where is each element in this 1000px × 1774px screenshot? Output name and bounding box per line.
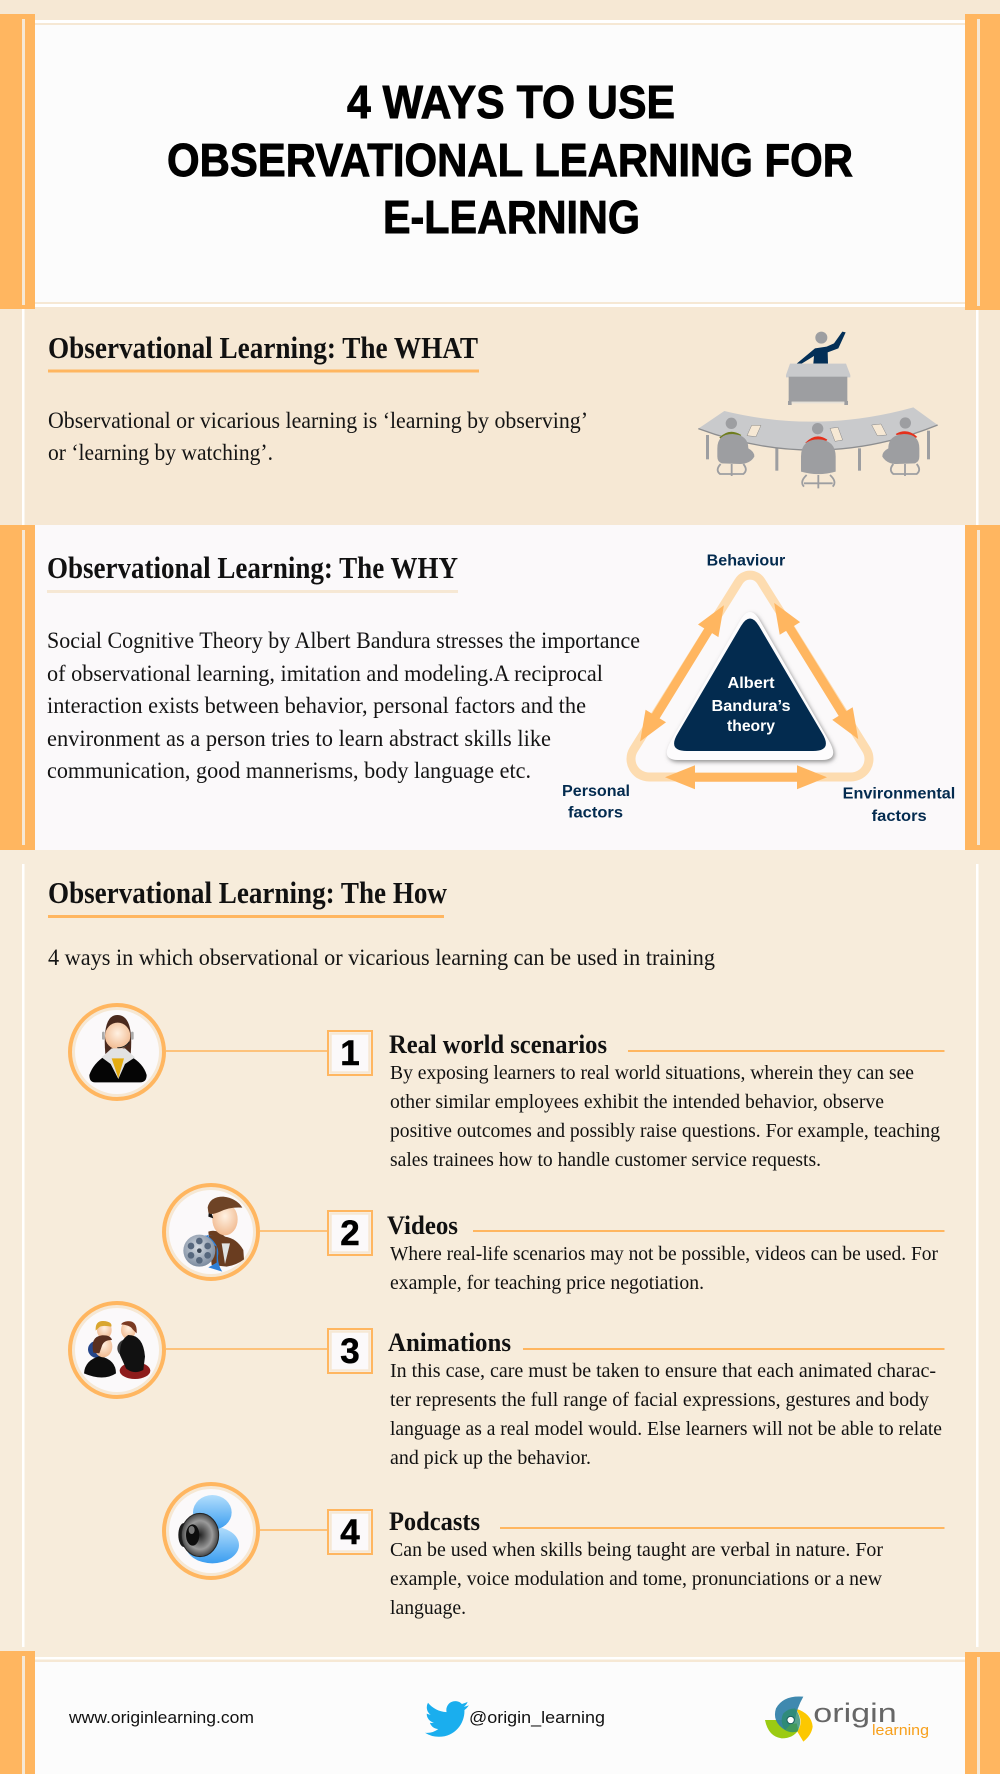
text: animations: and pick up the behavior.: [390, 1447, 591, 1469]
heading: the what: Observational Learning: The WHAT: [48, 330, 478, 365]
text: real world scenarios: By exposing learners to real world situations, wherein they can see: [390, 1062, 914, 1084]
arrow: personal to environmental factors: [665, 765, 827, 789]
triangle: white backing: [667, 612, 833, 760]
text: podcasts: Can be used when skills being taught are verbal in nature. For: [390, 1539, 883, 1561]
number box 3: 3: [340, 1332, 360, 1371]
panel: the what: [22, 307, 978, 525]
text: podcasts: [390, 1539, 883, 1619]
text: real world scenarios: [390, 1062, 940, 1171]
panel: the why: [0, 525, 1000, 850]
number box 4: [328, 1510, 372, 1554]
icon: twitter bird: [425, 1701, 469, 1737]
label: environmental factors: [843, 786, 955, 825]
panel: footer: [35, 1657, 965, 1774]
left orange side bars: [0, 14, 35, 1774]
number box 4: 4: [340, 1513, 360, 1552]
text: real world scenarios: positive outcomes and possibly raise questions. For example, teaching: [390, 1120, 940, 1142]
number box 3: [328, 1329, 372, 1373]
item 1: real world scenarios: [70, 1005, 944, 1171]
text: social cognitive theory: Social Cognitive Theory by Albert Bandura stresses the importance: [47, 628, 640, 653]
number box 2: 2: [340, 1214, 360, 1253]
text: animations: [390, 1360, 942, 1469]
text: social cognitive theory: [47, 628, 640, 783]
icon: user with speaker: [164, 1484, 258, 1578]
text: website: www.originlearning.com: [68, 1708, 254, 1727]
heading: real world scenarios: Real world scenarios: [389, 1030, 607, 1059]
arrow: behaviour to environmental factors: [764, 597, 868, 745]
icon: headset woman: [70, 1005, 164, 1099]
logo: origin learning: learning: [872, 1722, 929, 1739]
triangle: Albert Bandura's theory: Bandura’s: [712, 698, 791, 715]
logo: origin learning: [765, 1696, 929, 1742]
title: E-LEARNING: [383, 191, 640, 243]
text: podcasts: example, voice modulation and tome, pronunciations or a new: [390, 1568, 883, 1590]
heading: podcasts: Podcasts: [389, 1507, 480, 1536]
icon: classroom: [698, 332, 938, 488]
text: videos: Where real-life scenarios may not be possible, videos can be used. For: [390, 1243, 938, 1265]
label: personal factors: Personal: [562, 783, 630, 800]
text: social cognitive theory: interaction exists between behavior, personal factors and the: [47, 693, 586, 718]
label: behaviour: Behaviour: [707, 553, 785, 570]
diagram: reciprocal triangle: [562, 553, 955, 825]
text: real world scenarios: other similar employees exhibit the intended behavior, observe: [390, 1091, 884, 1113]
text: social cognitive theory: of observational learning, imitation and modeling.A reciprocal: [47, 661, 603, 686]
text: intro: 4 ways in which observational or vicarious learning can be used in training: [48, 945, 715, 970]
text: videos: example, for teaching price negotiation.: [390, 1272, 704, 1294]
item 2: videos: [164, 1185, 944, 1294]
text: videos: [390, 1243, 938, 1294]
triangle: Albert Bandura's theory: Albert: [728, 675, 775, 692]
item 4: podcasts: [164, 1484, 944, 1619]
label: personal factors: factors: [568, 805, 623, 822]
title: [167, 76, 853, 243]
text: social cognitive theory: communication, good mannerisms, body language etc.: [47, 758, 531, 783]
triangle: Albert Bandura's theory: [674, 618, 826, 751]
right orange side bars: [965, 14, 1000, 1774]
text: definition: [48, 408, 588, 465]
icon: man with film reel: [164, 1185, 258, 1279]
heading: the how: Observational Learning: The How: [48, 875, 448, 910]
heading: videos: Videos: [387, 1211, 458, 1240]
text: animations: ter represents the full range of facial expressions, gestures and body: [390, 1389, 929, 1411]
number box 1: [328, 1031, 372, 1075]
text: definition: or ‘learning by watching’.: [48, 440, 273, 465]
text: animations: language as a real model would. Else learners will not be able to relate: [390, 1418, 942, 1440]
title: 4 WAYS TO USE: [347, 76, 675, 128]
label: personal factors: [562, 783, 630, 822]
title: OBSERVATIONAL LEARNING FOR: [167, 134, 853, 186]
heading: animations: Animations: [388, 1328, 511, 1357]
text: definition: Observational or vicarious learning is ‘learning by observing’: [48, 408, 588, 433]
heading: the why: Observational Learning: The WHY: [47, 550, 458, 585]
icon: group of people: [70, 1303, 164, 1397]
item 3: animations: [70, 1303, 944, 1469]
logo: origin learning: origin: [813, 1698, 897, 1728]
text: animations: In this case, care must be taken to ensure that each animated charac-: [390, 1360, 936, 1382]
panel: the how: [0, 850, 1000, 1657]
number box 2: [328, 1211, 372, 1255]
triangle: Albert Bandura's theory: theory: [727, 718, 775, 735]
panel: title: [35, 20, 965, 307]
text: real world scenarios: sales trainees how to handle customer service requests.: [390, 1149, 821, 1171]
label: environmental factors: factors: [872, 808, 927, 825]
label: environmental factors: Environmental: [843, 786, 955, 803]
text: social cognitive theory: environment as a person tries to learn abstract skills like: [47, 726, 551, 751]
text: podcasts: language.: [390, 1597, 466, 1619]
text: twitter handle: @origin_learning: [469, 1708, 605, 1727]
number box 1: 1: [340, 1034, 360, 1073]
arrow: behaviour to personal factors: [630, 599, 734, 748]
